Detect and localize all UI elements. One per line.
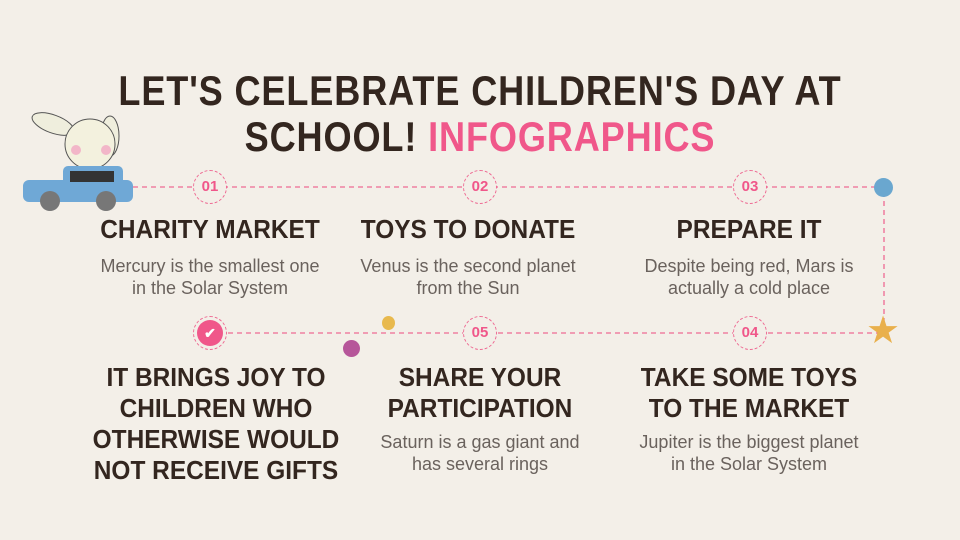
title: SCHOOL! INFOGRAPHICS <box>245 113 715 160</box>
panel: joy: IT BRINGS JOY TO <box>106 362 326 392</box>
panel: 02: Venus is the second planet <box>360 256 576 276</box>
marker 05 <box>463 316 497 350</box>
panel: 01 <box>100 214 320 298</box>
panel: 02: TOYS TO DONATE <box>361 214 575 244</box>
icon: star: ★ <box>866 310 900 352</box>
panel: 02 <box>360 214 576 298</box>
icon: purple dot <box>343 340 360 357</box>
marker 01: 01 <box>202 178 218 195</box>
icon: blue ball <box>874 178 893 197</box>
marker 04: 04 <box>742 324 758 341</box>
panel: 04 <box>639 362 859 474</box>
marker 04 <box>733 316 767 350</box>
marker check <box>193 316 227 350</box>
panel: 01: CHARITY MARKET <box>100 214 320 244</box>
marker 03 <box>733 170 767 204</box>
panel: 05: Saturn is a gas giant and <box>380 432 580 452</box>
panel: joy: CHILDREN WHO <box>120 393 312 423</box>
panel: 05: has several rings <box>412 454 548 474</box>
panel: 02: from the Sun <box>416 278 520 298</box>
panel: 05: SHARE YOUR <box>399 362 561 392</box>
panel: 03: PREPARE IT <box>677 214 821 244</box>
marker 05: 05 <box>472 324 488 341</box>
panel: 04: Jupiter is the biggest planet <box>639 432 859 452</box>
panel: 04: TAKE SOME TOYS <box>641 362 857 392</box>
icon: yellow dot <box>382 316 395 330</box>
marker check: ✔ <box>204 325 216 341</box>
title <box>118 67 842 160</box>
title: LET'S CELEBRATE CHILDREN'S DAY AT <box>118 67 842 114</box>
panel: joy <box>93 362 339 485</box>
marker 02: 02 <box>472 178 488 195</box>
panel: 03 <box>644 214 854 298</box>
panel: 03: Despite being red, Mars is <box>644 256 854 276</box>
panel: 04: TO THE MARKET <box>649 393 849 423</box>
panel: 05 <box>380 362 580 474</box>
panel: 05: PARTICIPATION <box>388 393 572 423</box>
panel: joy: NOT RECEIVE GIFTS <box>94 455 338 485</box>
icon: bunny in car <box>23 112 133 211</box>
marker 01 <box>193 170 227 204</box>
marker 02 <box>463 170 497 204</box>
panel: joy: OTHERWISE WOULD <box>93 424 339 454</box>
panel: 04: in the Solar System <box>671 454 827 474</box>
panel: 03: actually a cold place <box>668 278 830 298</box>
marker 03: 03 <box>742 178 758 195</box>
panel: 01: Mercury is the smallest one <box>100 256 320 276</box>
panel: 01: in the Solar System <box>132 278 288 298</box>
